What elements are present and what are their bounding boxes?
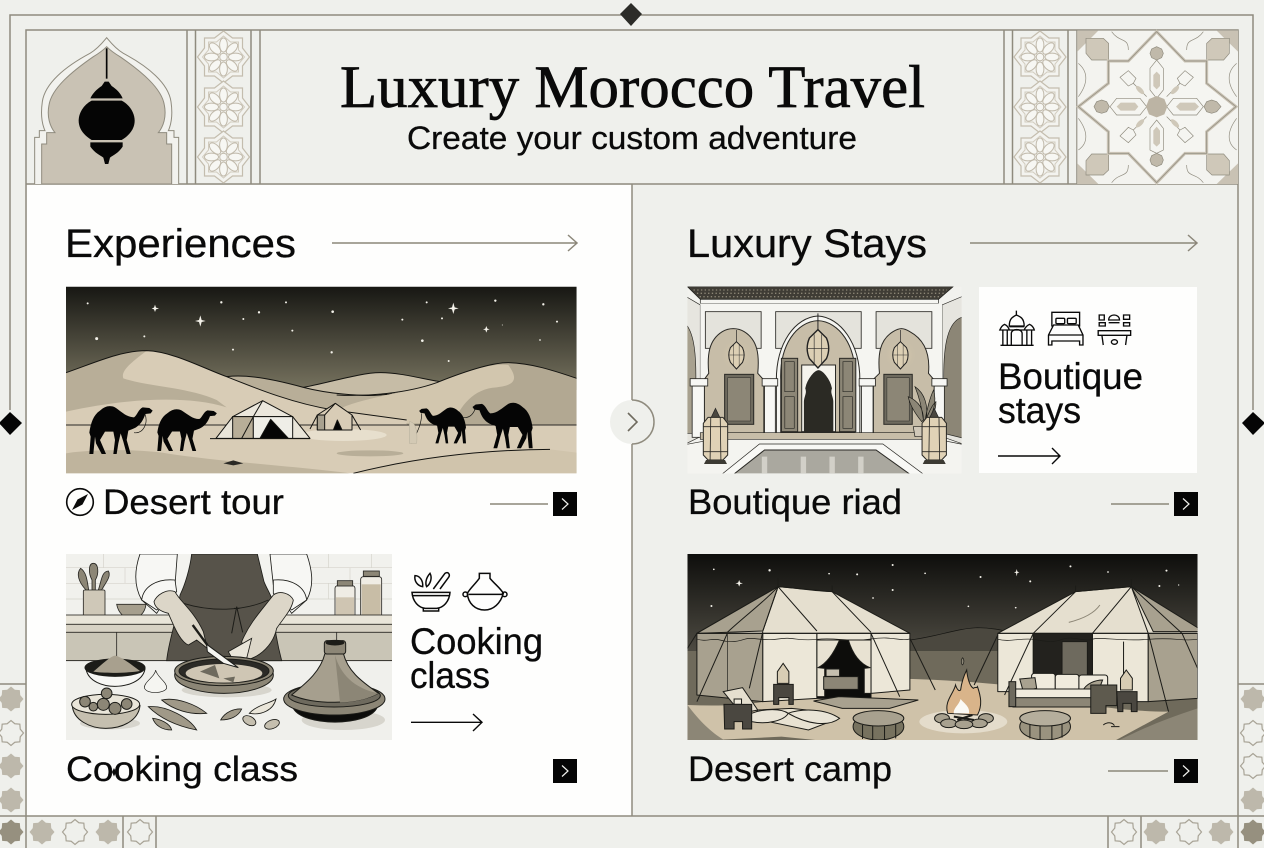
right tent — [974, 579, 1204, 712]
floor lanterns — [703, 408, 946, 464]
poufs — [853, 711, 1070, 740]
panel: experiences background — [27, 185, 632, 816]
stars — [87, 299, 558, 362]
card heading — [410, 621, 543, 696]
card heading: Boutique — [998, 356, 1143, 397]
icon: mosque — [1000, 311, 1034, 345]
connector: desert camp — [1108, 770, 1168, 772]
zellige tile — [1077, 31, 1238, 184]
campfire — [935, 658, 993, 729]
shadows — [302, 713, 385, 730]
card heading: class — [410, 655, 490, 696]
wall tiles — [66, 554, 392, 599]
subtitle: Create your custom adventure — [407, 120, 857, 156]
label: desert tour: Desert tour — [103, 483, 284, 522]
card heading — [998, 356, 1143, 431]
stars — [710, 564, 1179, 608]
camels — [89, 403, 533, 454]
button: desert camp — [1174, 759, 1198, 783]
diamond: top — [620, 3, 642, 26]
decorative stars: right column — [1240, 686, 1264, 812]
button: desert tour — [553, 492, 577, 516]
side arches — [704, 329, 764, 437]
connector: desert tour — [490, 503, 548, 505]
plant — [908, 387, 936, 437]
arrow: luxury stays — [970, 235, 1197, 251]
left tent — [687, 578, 935, 702]
dish and knife — [175, 625, 273, 693]
icon: mortar and pestle — [412, 573, 450, 611]
patterned column: left — [198, 31, 250, 183]
leaves — [148, 699, 281, 731]
bowls — [72, 656, 167, 728]
arrow — [411, 714, 482, 731]
label: cooking class: Cooking class — [66, 750, 298, 789]
illustration: desert camp — [687, 554, 1204, 740]
card: cooking class — [410, 573, 543, 731]
patterned column: right — [1014, 31, 1066, 183]
label: boutique riad: Boutique riad — [688, 483, 902, 522]
utensils and jars — [78, 563, 382, 619]
illustration: cooking class — [63, 554, 397, 744]
label: desert camp: Desert camp — [688, 750, 892, 789]
card heading: stays — [998, 390, 1081, 431]
decorative stars: bottom left — [0, 820, 152, 844]
counter — [66, 614, 392, 662]
sofa and table — [1009, 670, 1137, 713]
icon: bed — [1048, 312, 1083, 345]
arrow: experiences — [332, 235, 577, 251]
pillars — [690, 379, 947, 437]
icon: dining table — [1098, 315, 1131, 345]
arrow — [998, 448, 1060, 464]
central arch and door — [776, 316, 860, 433]
tents — [210, 401, 361, 439]
illustration: boutique riad — [683, 287, 966, 477]
card: boutique stays — [979, 287, 1197, 473]
decorative stars: left column — [0, 686, 24, 812]
connector: boutique riad — [1111, 503, 1169, 505]
button: boutique riad — [1174, 492, 1198, 516]
heading: luxury stays: Luxury Stays — [687, 222, 927, 266]
decorative stars: bottom right — [1112, 820, 1264, 844]
tajine — [284, 640, 385, 722]
title: Luxury Morocco Travel — [340, 54, 925, 120]
divider toggle — [610, 400, 654, 444]
arch with hanging lantern — [35, 38, 179, 184]
cook — [136, 554, 312, 665]
diamond: left — [0, 412, 22, 435]
button: cooking class — [553, 759, 577, 783]
small table and lantern, left — [723, 663, 918, 730]
floor and pool — [700, 433, 942, 439]
hanging lanterns — [729, 313, 908, 369]
diamond: right — [1242, 412, 1264, 435]
card heading: Cooking — [410, 621, 543, 662]
icon: tagine — [463, 573, 507, 610]
illustration: desert tour — [66, 287, 577, 473]
icon: compass — [67, 489, 93, 515]
heading: experiences: Experiences — [65, 222, 296, 266]
